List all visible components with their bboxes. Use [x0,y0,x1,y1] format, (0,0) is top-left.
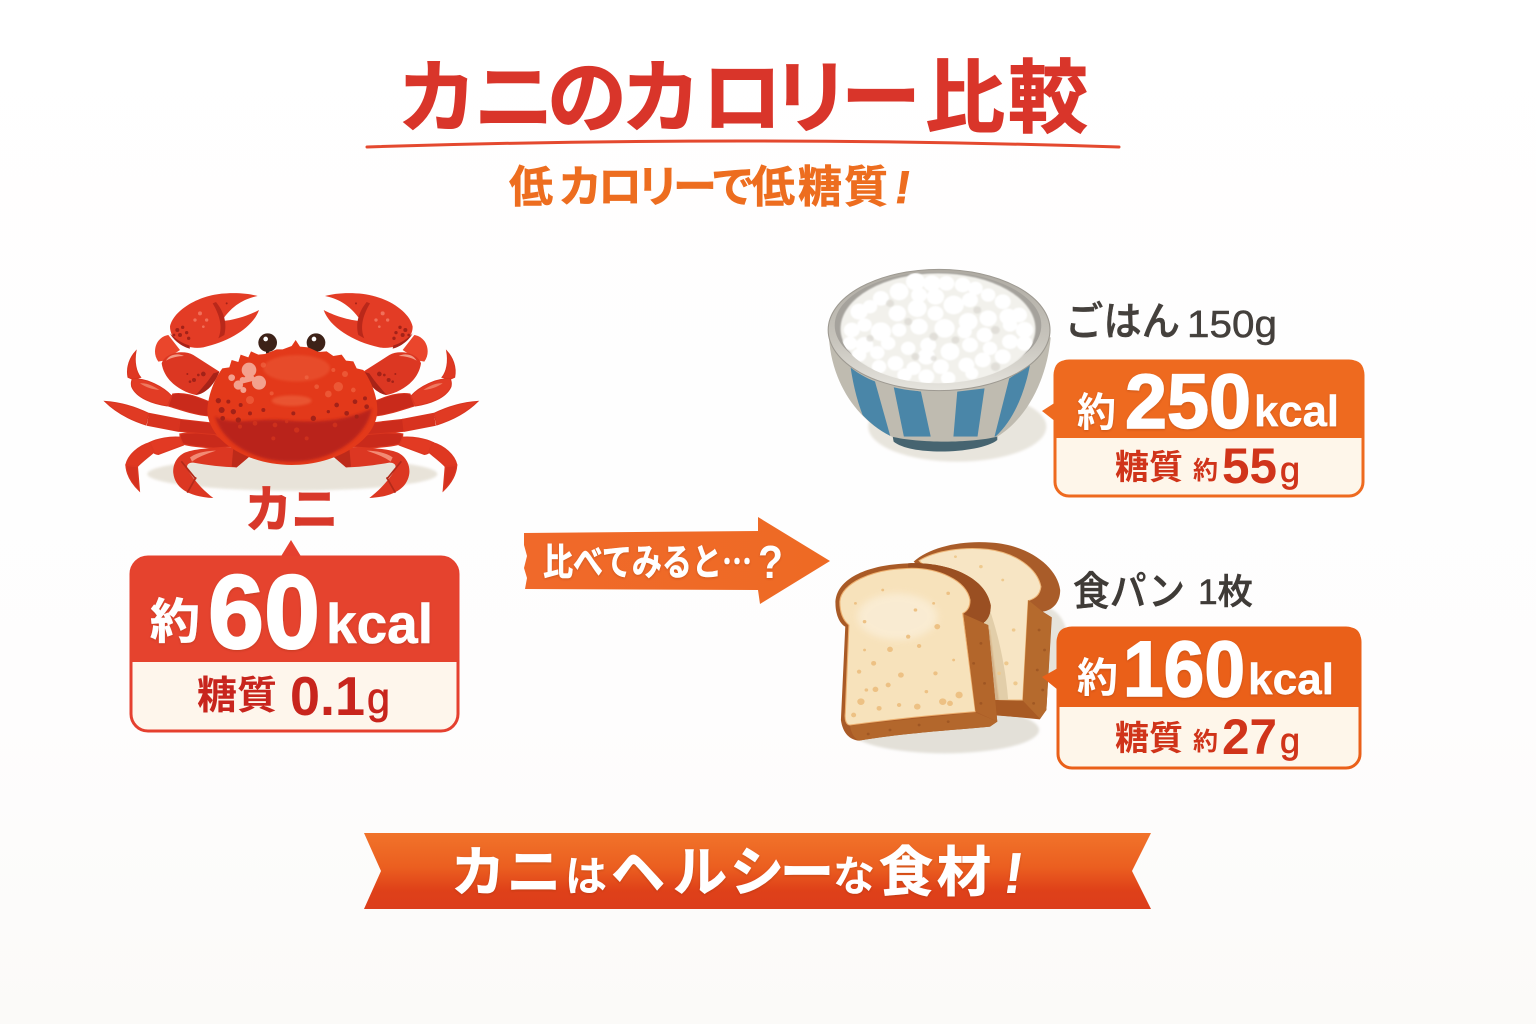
title: カニのカロリー比較 [397,34,1088,150]
icon: crab [105,293,478,498]
rice sugar value: 糖質 [1115,440,1183,489]
label: bread: 1枚 [1198,573,1253,612]
crab shell [207,340,377,465]
banner text: ヘルシー [611,828,834,907]
label: bread [1073,559,1253,617]
crab sugar value: 0.1 [290,665,365,727]
bread kcal value: 約 [1077,644,1118,704]
crab eyes [258,333,325,353]
label: crab: カニ [245,470,338,542]
label: rice: ごはん [1065,289,1180,347]
callout pointer up [280,540,302,558]
front slice [835,563,997,741]
crab sugar value: 糖質 [197,665,277,721]
panel: bread nutrition [1042,624,1361,768]
callout pointer left [1042,402,1056,422]
bread sugar value: 糖質 [1115,711,1183,760]
icon: rice bowl [828,269,1051,462]
crab kcal value: kcal [326,592,433,655]
banner text: 食材 [879,828,991,907]
crab sugar value [197,665,390,727]
label: rice [1065,289,1277,347]
bowl foot [892,432,997,452]
exclamation mark: ! [891,161,915,213]
rice kcal value: 250 [1125,359,1251,445]
rice sugar value: 約 [1193,451,1218,487]
bread sugar value: 27 [1222,709,1277,765]
bowl rim [828,269,1050,391]
rice sugar value [1115,438,1300,494]
bread sugar value: g [1280,720,1300,761]
panel: rice nutrition [1042,359,1364,496]
banner text [451,828,1028,907]
back slice [914,542,1060,719]
bread sugar value [1115,709,1300,765]
banner text: カニ [451,828,561,907]
rice kcal value: kcal [1254,387,1339,436]
rice sugar value: 55 [1222,438,1277,494]
rice sugar value: g [1280,449,1300,490]
banner text: ! [1000,841,1028,906]
banner text: な [833,843,875,904]
rice [841,273,1035,385]
bread kcal value [1077,624,1334,713]
bread kcal value: kcal [1248,655,1334,704]
rice kcal value: 約 [1077,380,1116,438]
banner: conclusion [364,828,1151,909]
rice kcal value [1077,359,1339,445]
label: rice: 150g [1187,304,1277,346]
bread sugar value: 約 [1193,722,1218,758]
banner text: は [565,843,607,904]
subtitle: 低カロリーで低糖質 [509,151,888,215]
crab sugar value: g [367,674,390,723]
icon: bread [835,542,1068,753]
crab kcal value: 約 [150,582,200,652]
crab kcal value: 60 [208,554,320,671]
panel: crab nutrition [130,540,458,731]
label: bread: 食パン [1073,559,1185,617]
bread shadow [850,707,1039,753]
bowl body [829,337,1051,442]
crab right half [324,293,478,498]
title underline [367,141,1119,147]
callout pointer left [1042,668,1058,690]
crab kcal value [150,554,433,671]
arrow label: ? [758,536,783,588]
bread kcal value: 160 [1123,624,1245,713]
arrow label: 比べてみると… [543,532,752,586]
crab shadow [147,457,437,491]
arrow: compare [524,517,830,604]
bowl shadow [868,392,1046,462]
